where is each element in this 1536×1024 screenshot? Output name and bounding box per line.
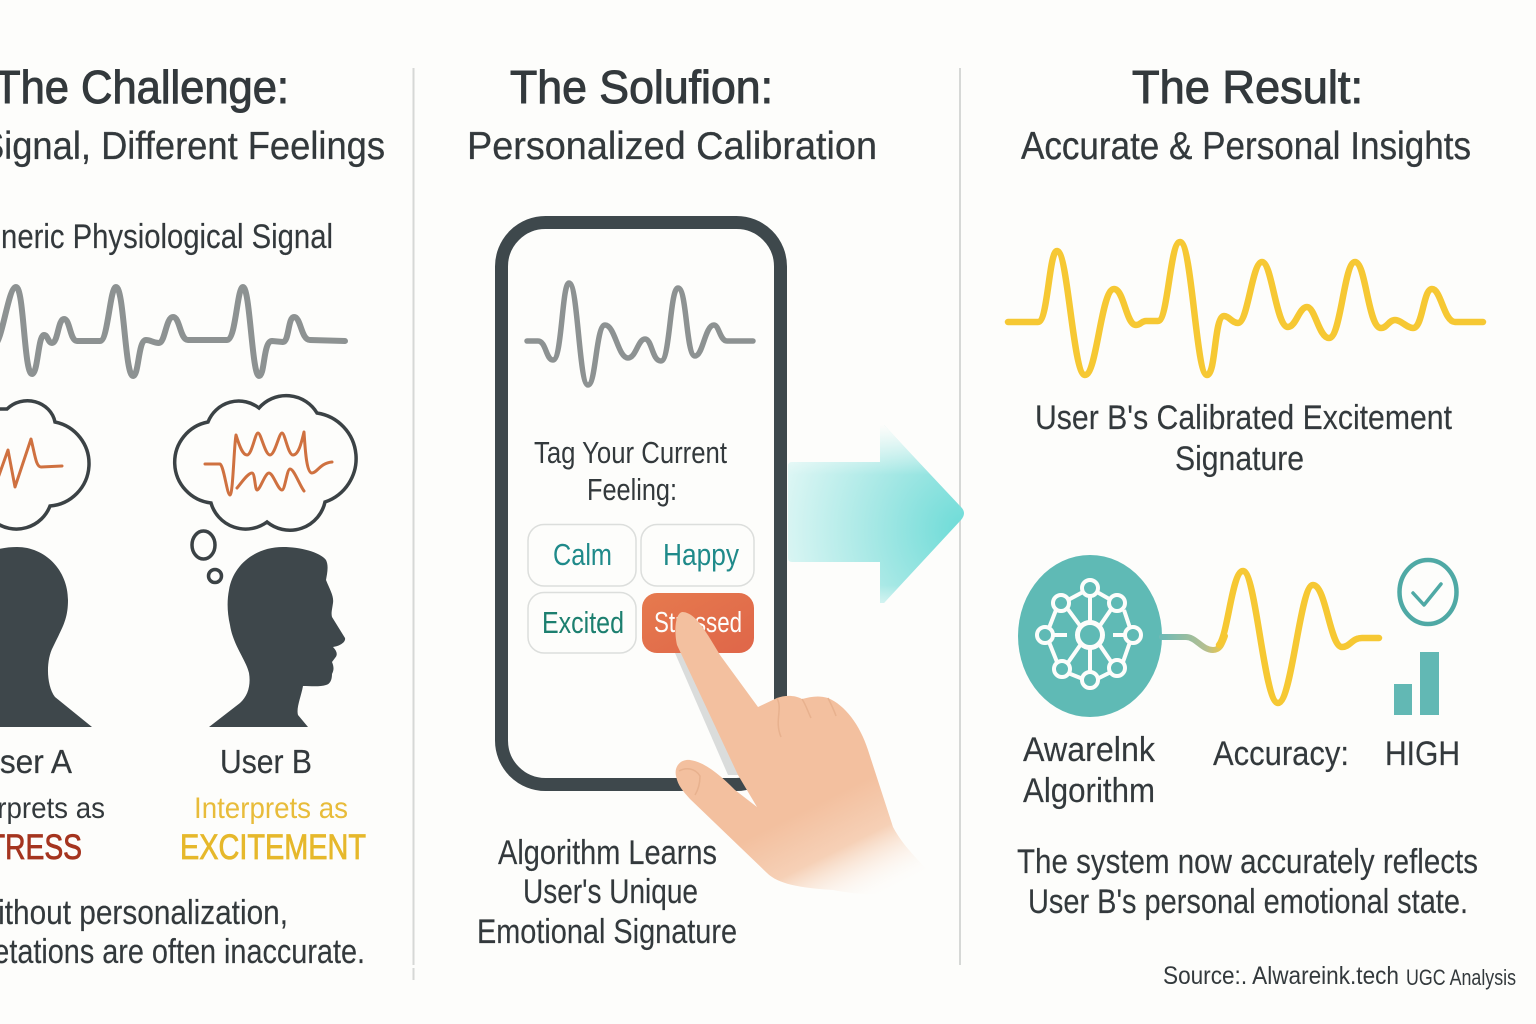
heading: the solution: The Solufion:	[510, 61, 773, 113]
text: challenge conclusion	[0, 894, 365, 971]
heading: the challenge: The Challenge:	[0, 61, 289, 113]
button: excited: Excited	[542, 605, 624, 640]
label: interprets as excitement	[180, 792, 366, 867]
icon: thought cloud user A	[0, 401, 89, 529]
text: algorithm learns: User's Unique	[523, 873, 698, 911]
label: awareink algorithm	[1023, 731, 1156, 810]
divider left	[412, 68, 414, 980]
text: algorithm learns	[477, 834, 737, 951]
button: calm	[528, 524, 636, 586]
panel: the result	[1008, 61, 1516, 990]
icon: head user B	[209, 547, 345, 727]
text: algorithm learns: Algorithm Learns	[498, 834, 717, 872]
panel: the solution	[467, 61, 964, 951]
heading: the result: The Result:	[1132, 61, 1363, 113]
label: user B: User B	[220, 743, 312, 780]
icon: accuracy bars	[1394, 652, 1439, 715]
icon: head user A	[0, 547, 92, 727]
icon: thought cloud user B	[175, 396, 356, 582]
label: interprets as excitement: Interprets as	[194, 792, 348, 825]
text: result conclusion: The system now accurately reflects	[1017, 843, 1478, 881]
subheading: personalized calibration: Personalized Calibration	[467, 125, 877, 168]
label: calibrated signature	[1035, 399, 1452, 478]
panel: the challenge	[0, 61, 385, 971]
label: accuracy: Accuracy:	[1213, 735, 1349, 773]
icon: hand tapping	[675, 612, 935, 894]
text: tag your feeling: Feeling:	[587, 472, 677, 507]
label: interprets as excitement: EXCITEMENT	[180, 828, 366, 867]
connector line	[1162, 636, 1225, 650]
chart: algorithm wave	[1219, 571, 1379, 703]
text: algorithm learns: Emotional Signature	[477, 913, 737, 951]
subheading: accurate insights: Accurate & Personal Insights	[1021, 125, 1471, 168]
button: happy: Happy	[663, 537, 739, 572]
chart: generic signal wave	[0, 287, 345, 376]
text: result conclusion: User B's personal emotional state.	[1028, 883, 1468, 921]
label: calibrated signature: User B's Calibrated Excitement	[1035, 399, 1452, 437]
button: stressed selected	[642, 593, 754, 653]
icon: check badge	[1400, 560, 1456, 624]
text: result conclusion	[1017, 843, 1478, 921]
text: tag your feeling	[534, 435, 727, 507]
arrow: challenge to result	[788, 425, 964, 603]
button: excited	[528, 592, 636, 653]
finger shadow	[675, 653, 748, 775]
icon: phone frame	[502, 222, 780, 784]
text: tag your feeling: Tag Your Current	[534, 435, 727, 470]
label: calibrated signature: Signature	[1175, 440, 1304, 478]
chart: phone signal wave	[527, 283, 753, 385]
button: calm: Calm	[553, 537, 612, 572]
label: high: HIGH	[1385, 735, 1460, 773]
button: happy	[641, 524, 754, 586]
icon: awareink algorithm network	[1018, 555, 1162, 717]
label: interprets as stress	[0, 792, 105, 867]
label: awareink algorithm: Algorithm	[1023, 772, 1155, 810]
chart: calibrated excitement wave	[1008, 242, 1483, 375]
label: awareink algorithm: Awarelnk	[1023, 731, 1156, 769]
source note: Source:. Alwareink.tech	[1163, 962, 1399, 990]
divider right	[959, 68, 961, 965]
button: stressed selected: Stressed	[654, 607, 742, 639]
